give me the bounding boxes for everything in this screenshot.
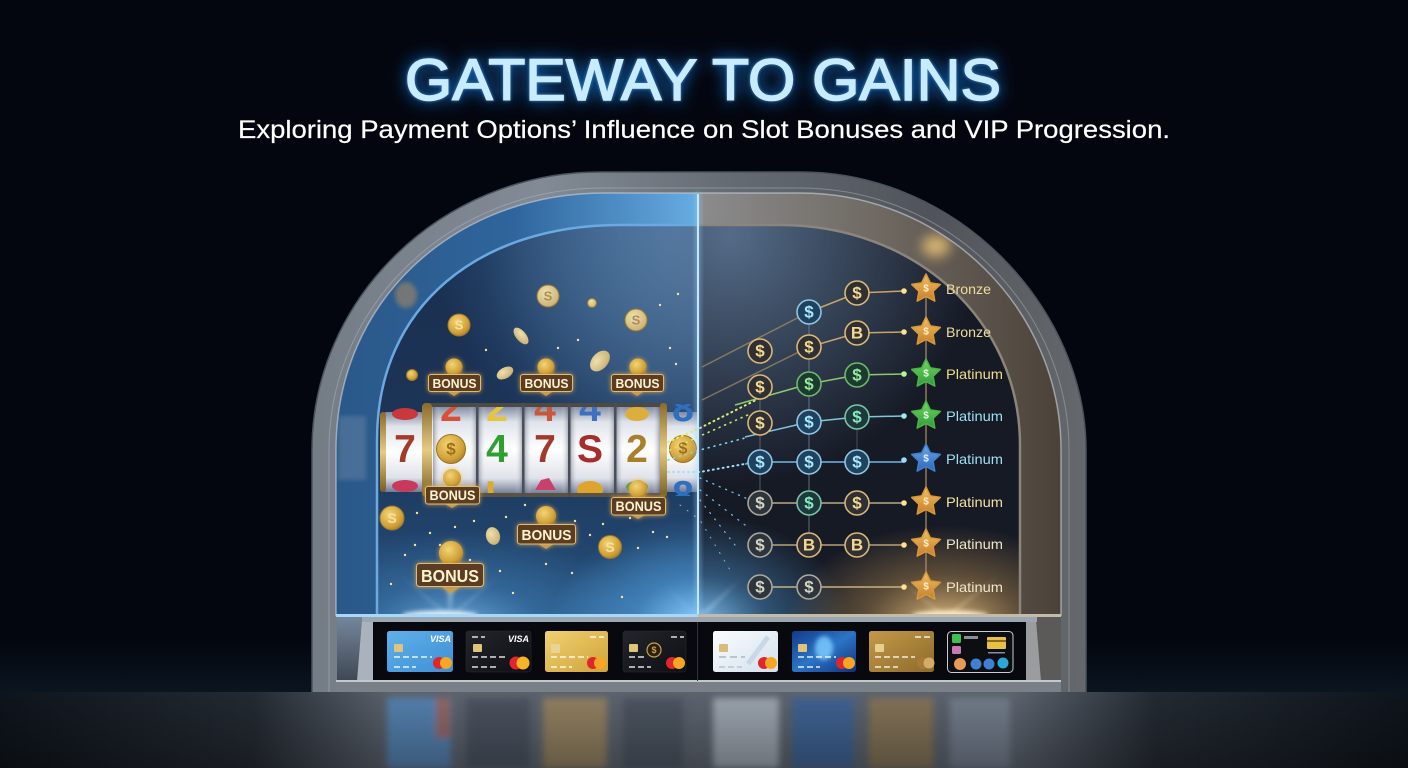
payment card 8: digital wallet: [948, 632, 1013, 672]
bonus badge 1: [428, 358, 480, 396]
payment card 4: black emblem: $: [651, 645, 657, 655]
falling gold coins: S: [605, 539, 615, 555]
partial top and bottom symbols: [392, 404, 693, 496]
payment node coins: $: [804, 338, 814, 356]
tier star row 7: $: [923, 538, 929, 550]
title: GATEWAY TO GAINS: [405, 48, 1001, 113]
center symbols: $: [446, 440, 456, 458]
payment node coins: $: [755, 494, 765, 512]
payment node coins: $: [852, 366, 862, 384]
payment node coins: $: [852, 452, 862, 472]
bonus badge 2: BONUS: [524, 376, 569, 391]
payment node coins: $: [852, 284, 862, 302]
bottom light strip: [336, 614, 1061, 617]
base console frame: [336, 617, 1061, 692]
bonus badge 2: [520, 358, 572, 396]
tier star row 6: $: [923, 496, 929, 508]
falling gold coins: [380, 285, 647, 558]
falling gold coins: S: [387, 510, 397, 526]
center symbols: 7: [534, 428, 556, 471]
bonus badge 6: [518, 506, 576, 549]
center symbols: $: [679, 440, 688, 458]
partial top and bottom symbols: 2: [440, 387, 462, 430]
payment node coins: $: [755, 536, 765, 554]
payment node coins: $: [755, 414, 765, 432]
payment node coins: [748, 281, 869, 599]
tier label: Bronze: Bronze: [946, 281, 991, 297]
payment node coins: $: [755, 578, 765, 596]
payment node coins: $: [755, 378, 765, 396]
payment node coins: B: [803, 536, 815, 554]
center symbols: S: [577, 428, 603, 471]
tier star row 8: $: [923, 582, 929, 592]
panel: VIP progression glass: [524, 226, 1019, 614]
tier label: Platinum: Platinum: [946, 536, 1003, 552]
partial top and bottom symbols: 4: [534, 387, 556, 430]
tier star row 5: $: [923, 454, 929, 464]
partial top and bottom symbols: 8: [672, 474, 694, 517]
center symbols: 7: [394, 428, 416, 471]
VIP connector lines: [702, 289, 926, 587]
slot machine reels: [380, 403, 697, 497]
subtitle: Exploring Payment Options’ Influence on Slot Bonuses and VIP Progression.: [238, 116, 1170, 144]
payment card 1: blue Visa: [387, 631, 453, 672]
bonus badge 5: BONUS: [616, 499, 662, 514]
center symbols: [396, 434, 697, 464]
bonus badge 4: [426, 469, 480, 508]
bonus badge 7: [416, 541, 484, 593]
gold sparkles: [391, 294, 678, 597]
payment node coins: $: [852, 494, 862, 512]
payment card 4: black emblem: [623, 631, 686, 672]
tier star row 3: [912, 359, 940, 386]
tier star row 1: [912, 274, 940, 301]
payment node coins: $: [804, 578, 814, 596]
reel body: [380, 406, 700, 494]
arch frame: [312, 172, 1086, 692]
reel dividers: [422, 403, 667, 497]
frame highlight: [336, 193, 1061, 616]
payment card 2: black Visa: VISA: [508, 634, 529, 644]
bonus badge 3: [612, 358, 664, 396]
connector end dots: [901, 288, 907, 590]
partial top and bottom symbols: 2: [486, 387, 508, 430]
tier star row 5: [912, 444, 940, 471]
payment node coins: B: [851, 536, 863, 554]
glass band: [330, 190, 1068, 620]
bonus badge 3: BONUS: [616, 376, 660, 391]
tier star row 7: [912, 529, 940, 556]
tier label: Platinum: Platinum: [946, 579, 1003, 595]
payment card 6: blue burst: [792, 631, 856, 672]
panel: slot bonuses glass: [378, 226, 697, 614]
tier star row 2: $: [923, 326, 929, 338]
divider: center light beam: [695, 193, 701, 617]
payment node coins: $: [755, 452, 765, 472]
payment node coins: $: [804, 494, 814, 512]
bonus badge 7: BONUS: [421, 566, 479, 586]
payment node coins: $: [804, 412, 814, 432]
tier label: Platinum: Platinum: [946, 366, 1003, 382]
payment node coins: B: [851, 324, 863, 342]
bonus badge 6: BONUS: [522, 527, 572, 544]
tier star row 2: [912, 317, 940, 344]
payment card 1: blue Visa: VISA: [430, 634, 451, 644]
bonus badge 1: BONUS: [432, 376, 477, 391]
payment card 5: white: [713, 631, 778, 672]
tier star row 3: $: [923, 368, 929, 380]
reflective floor: [0, 692, 1408, 768]
inner glass edge: [377, 225, 1020, 616]
tier star row 8: [912, 572, 940, 599]
center symbols: 2: [626, 428, 648, 471]
tier star row 4: $: [923, 410, 929, 422]
center symbols: 4: [486, 428, 508, 471]
payment node coins: $: [804, 302, 814, 322]
tier label: Platinum: Platinum: [946, 451, 1003, 467]
payment card 3: gold: [545, 631, 608, 672]
falling gold coins: S: [544, 288, 553, 304]
payment card 7: bronze: [869, 631, 934, 672]
energy streams from reels to VIP paths: [668, 398, 760, 570]
payment node coins: $: [852, 408, 862, 426]
payment node coins: $: [755, 342, 765, 360]
payment card 2: black Visa: [466, 631, 531, 672]
tier label: Platinum: Platinum: [946, 494, 1003, 510]
payment node coins: $: [804, 374, 814, 394]
falling gold coins: S: [455, 318, 464, 332]
tier star row 6: [912, 487, 940, 514]
tier label: Platinum: Platinum: [946, 408, 1003, 424]
falling gold coins: S: [632, 312, 641, 328]
bonus badge 4: BONUS: [430, 488, 476, 503]
tier label: Bronze: Bronze: [946, 324, 991, 340]
payment node coins: $: [804, 452, 814, 472]
tier star row 1: $: [923, 284, 929, 294]
partial top and bottom symbols: L: [485, 474, 509, 517]
partial top and bottom symbols: 4: [579, 387, 601, 430]
bonus badge 5: [612, 480, 666, 519]
tier star row 4: [912, 401, 940, 428]
partial top and bottom symbols: 8: [672, 387, 694, 430]
